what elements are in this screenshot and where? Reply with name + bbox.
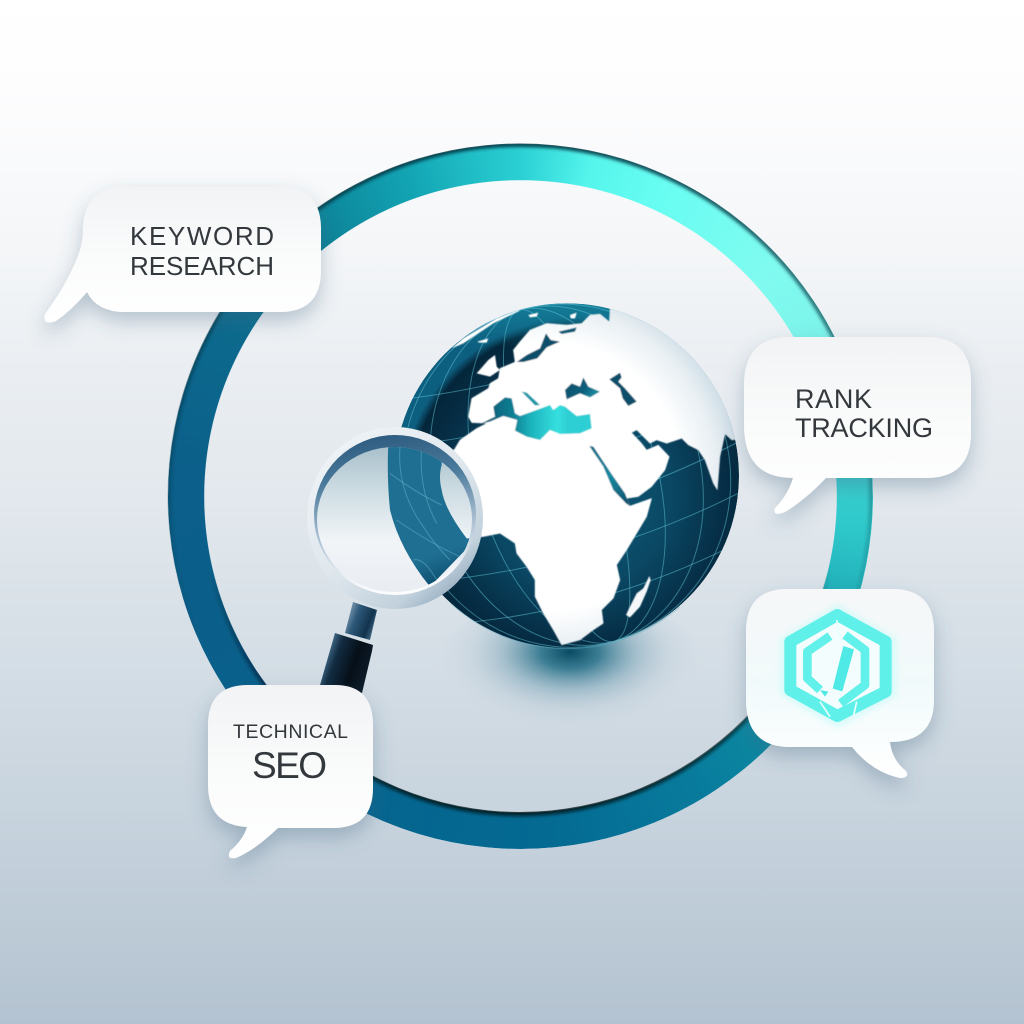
bubble: technical seo: [208, 685, 373, 858]
globe ground shadow: [432, 596, 708, 748]
magnifier neck: [345, 602, 377, 640]
adriatic sea: [522, 392, 540, 405]
label: keyword research: RESEARCH: [130, 251, 274, 281]
magnifier outer rim: [307, 427, 483, 609]
label: technical seo: SEO: [252, 745, 327, 786]
icon: cyan hexagon with exclamation mark: [780, 603, 897, 728]
lens magnified globe: [388, 447, 470, 584]
caspian sea: [609, 373, 637, 406]
globe rim: [452, 604, 680, 649]
land and seas: [452, 308, 736, 646]
land masses: [453, 308, 736, 646]
label: keyword research: KEYWORD: [130, 221, 274, 251]
label: technical seo: TECHNICAL: [233, 721, 348, 743]
madagascar: [626, 576, 651, 617]
magnifying glass: [307, 427, 483, 693]
progress ring: [168, 144, 872, 848]
bubble: hexagon icon: [746, 589, 934, 778]
magnifier grip: [320, 633, 373, 693]
mediterranean sea: [480, 397, 592, 440]
ring groove shading: [168, 144, 872, 848]
globe: [401, 303, 739, 650]
bubble: keyword research: [44, 187, 321, 322]
red sea: [589, 446, 630, 506]
globe grid lines: [408, 304, 738, 648]
magnifier lens: [317, 447, 472, 592]
british isles: [477, 355, 500, 377]
globe ocean: [394, 303, 739, 648]
iceland and arctic islands: [452, 310, 577, 348]
label: rank tracking: RANK: [795, 384, 872, 414]
baltic sea: [517, 333, 560, 362]
black sea: [565, 377, 600, 399]
bubble: rank tracking: [744, 337, 971, 514]
label: rank tracking: TRACKING: [795, 413, 933, 443]
magnifier inner bevel: [314, 435, 476, 595]
gulf of finland: [558, 327, 577, 334]
